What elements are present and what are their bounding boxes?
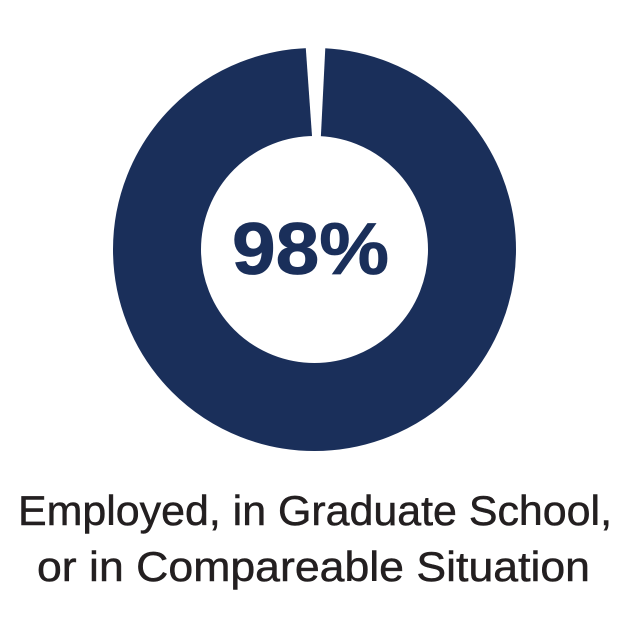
center value: 98%: 98% [232, 209, 389, 290]
caption line 1: Employed, in Graduate School, [18, 487, 612, 534]
donut chart: 98% [157, 44, 472, 407]
remaining 2% wedge [306, 44, 326, 140]
donut ring [157, 92, 472, 407]
caption [18, 487, 612, 590]
caption line 2: or in Compareable Situation [37, 543, 590, 590]
